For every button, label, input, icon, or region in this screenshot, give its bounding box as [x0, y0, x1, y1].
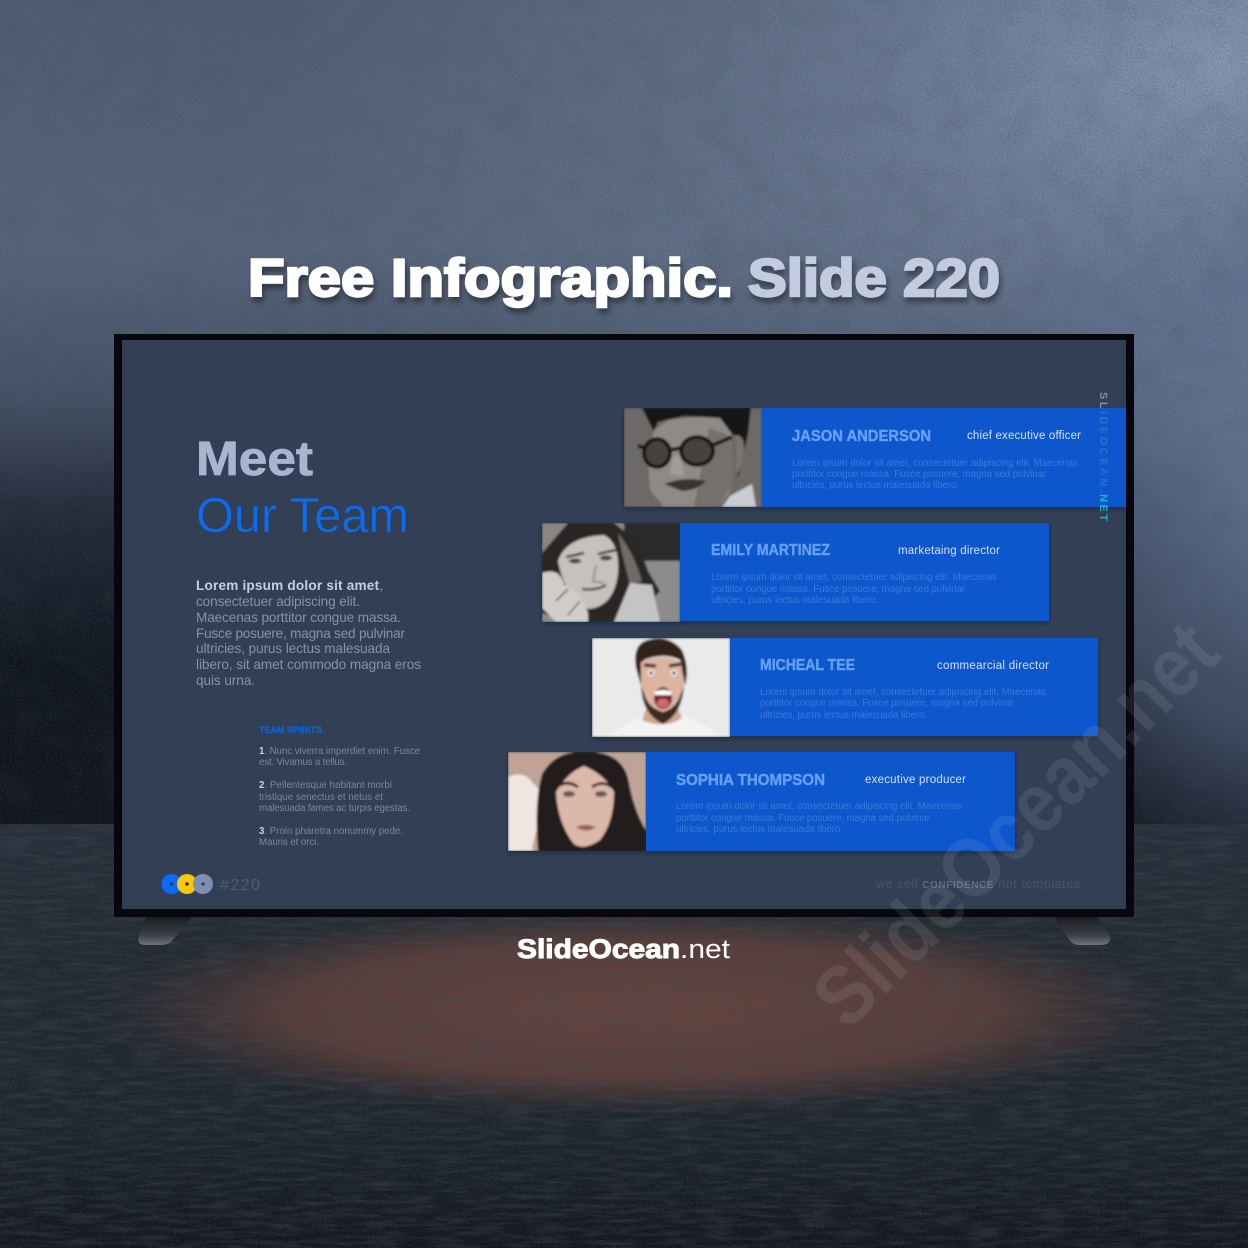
- role: Emily: marketaing director: [898, 545, 1000, 557]
- title: Free Infographic.: [248, 249, 733, 308]
- intro paragraph: Maecenas porttitor congue massa.: [196, 610, 401, 625]
- list of three points: malesuada fames ac turpis egestas.: [259, 803, 410, 814]
- card: Sophia Thompson: [508, 752, 1015, 851]
- description: Jason: porttitor congue massa. Fusce posuere, magna sed pulvinar: [792, 469, 1047, 480]
- description: Jason: [792, 458, 1078, 491]
- description: Emily: ultricies, purus lectus malesuada libero.: [711, 595, 878, 606]
- description: Emily: [711, 572, 997, 606]
- description: Sophia: [676, 801, 962, 835]
- name: Emily: EMILY MARTINEZ: [711, 542, 830, 559]
- list of three points: tristique senectus et netus et: [259, 792, 383, 803]
- list of three points: 2. Pellentesque habitant morbi: [259, 780, 392, 791]
- role: Sophia: executive producer: [865, 774, 966, 786]
- intro paragraph: [196, 578, 421, 688]
- background: floor with warm glow: [0, 824, 1248, 1248]
- monitor stand: right foot: [1054, 917, 1110, 945]
- description: Micheal: [760, 687, 1046, 721]
- bar: Emily: [680, 523, 1049, 621]
- heading: Meet Our Team: Meet: [196, 433, 313, 486]
- footer brand: SlideOcean.net: SlideOcean .net: [517, 934, 731, 964]
- description: Micheal: Lorem ipsum dolor sit amet, consectetuer adipiscing elit. Maecenas: [760, 687, 1046, 698]
- heading: Meet Our Team: Our Team: [196, 489, 409, 543]
- intro paragraph: quis urna.: [196, 673, 255, 688]
- intro paragraph: libero, sit amet commodo magna eros: [196, 657, 421, 672]
- intro paragraph: consectetuer adipiscing elit.: [196, 594, 360, 609]
- description: Jason: ultricies, purus lectus malesuada libero.: [792, 480, 959, 491]
- description: Sophia: ultricies, purus lectus malesuada libero.: [676, 824, 843, 835]
- description: Sophia: porttitor congue massa. Fusce posuere, magna sed pulvinar: [676, 813, 931, 824]
- background: concrete wall: [0, 0, 1248, 900]
- intro paragraph: Fusce posuere, magna sed pulvinar: [196, 626, 405, 641]
- portrait: Sophia: [508, 752, 646, 851]
- description: Micheal: ultricies, purus lectus malesuada libero.: [760, 710, 927, 721]
- description: Micheal: porttitor congue massa. Fusce posuere, magna sed pulvinar: [760, 698, 1015, 709]
- card: Emily Martinez: [542, 523, 1049, 622]
- bar: Jason: [762, 408, 1126, 507]
- name: Jason: JASON ANDERSON: [792, 428, 931, 445]
- title: Slide 220: [748, 249, 1000, 308]
- slide number: #220: [220, 877, 260, 894]
- list of three points: est. Vivamus a tellus.: [259, 757, 347, 768]
- vertical brand label: SL IDEOCEAN . NET: [1097, 392, 1109, 521]
- list of three points: [259, 746, 420, 848]
- card: Jason Anderson: [624, 408, 1126, 507]
- description: Emily: Lorem ipsum dolor sit amet, consectetuer adipiscing elit. Maecenas: [711, 572, 997, 583]
- intro paragraph: Lorem ipsum dolor sit amet,: [196, 578, 383, 593]
- description: Sophia: Lorem ipsum dolor sit amet, consectetuer adipiscing elit. Maecenas: [676, 801, 962, 812]
- list of three points: 3. Proin pharetra nonummy pede.: [259, 826, 403, 837]
- list heading: team spirits: TEAM SPIRITS: [259, 725, 322, 736]
- card: Micheal Tee: [592, 638, 1098, 737]
- heading: Meet Our Team: [196, 433, 409, 543]
- monitor frame: [114, 334, 1134, 917]
- bar: Sophia: [646, 752, 1015, 851]
- title: [248, 249, 1000, 308]
- list of three points: Mauris et orci.: [259, 837, 319, 848]
- description: Jason: Lorem ipsum dolor sit amet, consectetuer adipiscing elit. Maecenas: [792, 458, 1078, 469]
- name: Sophia: SOPHIA THOMPSON: [676, 772, 825, 789]
- portrait: Jason: [624, 408, 762, 507]
- role: Micheal: commearcial director: [937, 660, 1049, 672]
- description: Emily: porttitor congue massa. Fusce posuere, magna sed pulvinar: [711, 584, 966, 595]
- monitor stand: left foot: [138, 917, 192, 945]
- logo: three discs: [162, 874, 213, 894]
- bar: Micheal: [730, 638, 1098, 736]
- portrait: Emily: [542, 523, 680, 622]
- intro paragraph: ultricies, purus lectus malesuada: [196, 641, 390, 656]
- portrait: Micheal: [592, 638, 730, 737]
- list of three points: 1. Nunc viverra imperdiet enim. Fusce: [259, 746, 420, 757]
- name: Micheal: MICHEAL TEE: [760, 657, 855, 674]
- role: Jason: chief executive officer: [967, 430, 1081, 442]
- slide panel: [122, 340, 1126, 909]
- tagline: we sell CONFIDENCE not templates: [875, 877, 1080, 891]
